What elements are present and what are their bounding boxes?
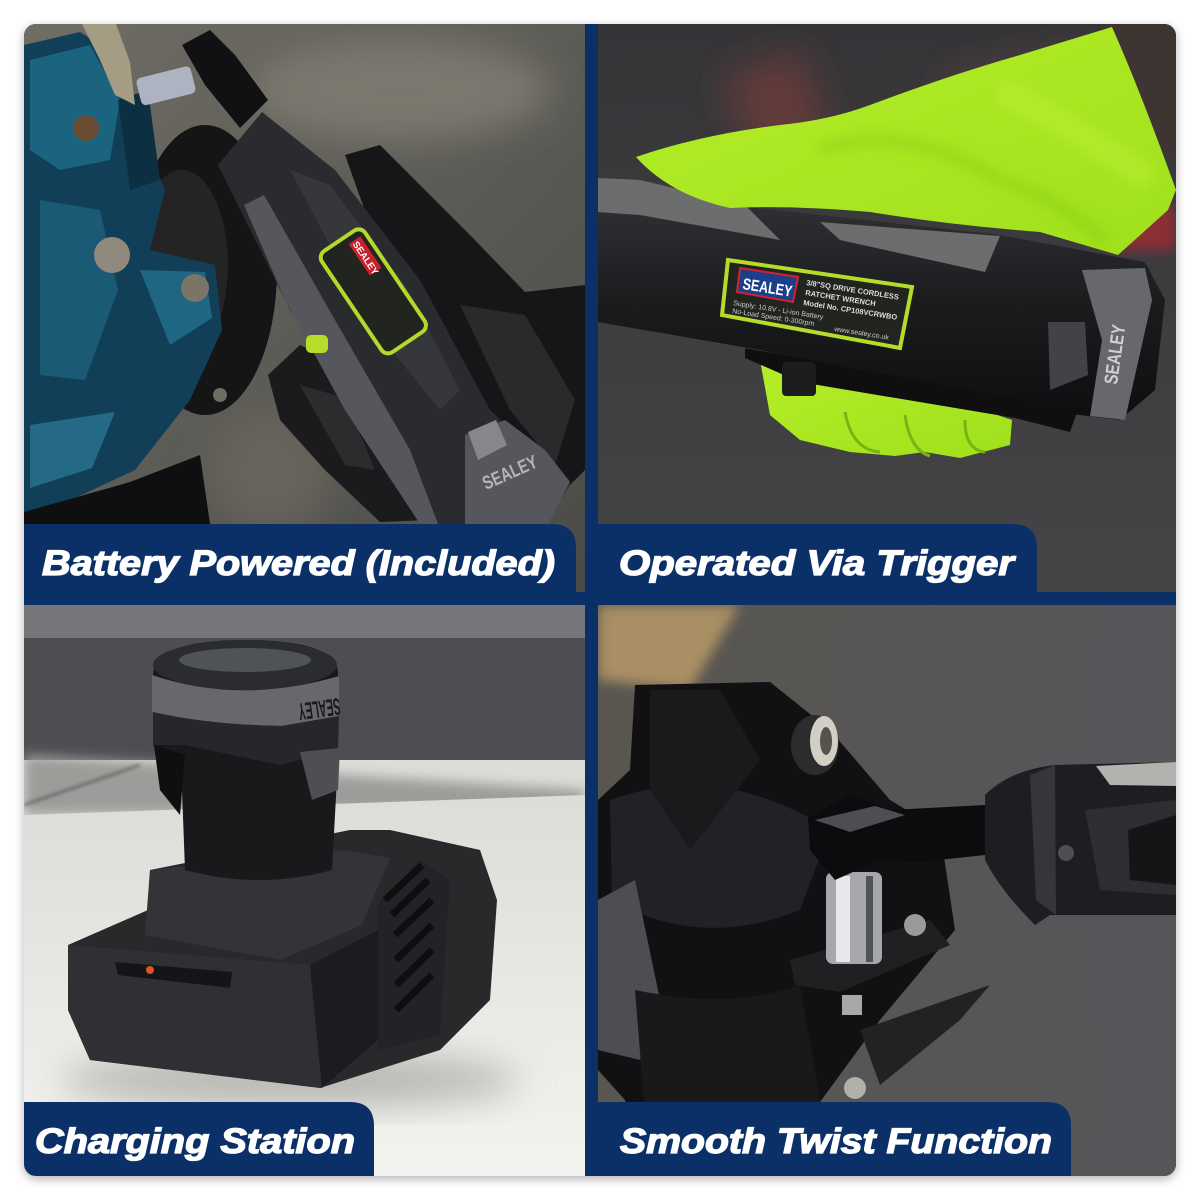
icon: socket — [826, 872, 882, 964]
icon: black work glove — [268, 145, 585, 522]
icon: blue engine — [24, 32, 227, 524]
caption: battery powered: Battery Powered (Included) — [42, 544, 555, 583]
icon: trigger and black tool body: SEALEY — [1101, 323, 1130, 386]
tool label: www.sealey.co.uk — [833, 326, 890, 342]
tool label: RATCHET WRENCH — [805, 288, 876, 308]
panel: operated via trigger photo — [598, 24, 1176, 592]
icon: ratchet tool: SEALEY — [479, 452, 541, 495]
tool label: Model No. CP108VCRWBO — [803, 298, 898, 322]
caption tab: smooth twist function — [586, 1102, 1071, 1176]
icon: battery — [152, 640, 342, 880]
caption tab: operated via trigger — [586, 524, 1037, 592]
icon: ratchet tool — [182, 30, 570, 524]
icon: battery: SEALEY — [297, 692, 342, 725]
panel: charging station photo — [24, 605, 585, 1176]
panel: smooth twist function photo — [598, 605, 1176, 1176]
tool label — [722, 260, 912, 348]
tool label: SEALEY — [741, 276, 794, 301]
caption: charging station: Charging Station — [35, 1122, 355, 1161]
caption tab: battery powered — [24, 524, 576, 592]
caption: operated via trigger: Operated Via Trigger — [619, 544, 1017, 583]
tool label: Supply: 10.8V - Li-ion Battery — [733, 300, 824, 321]
icon: black engine assembly — [598, 682, 990, 1102]
icon: pulley — [150, 125, 277, 415]
caption: smooth twist function: Smooth Twist Function — [620, 1122, 1052, 1161]
tool label: 3/8"SQ DRIVE CORDLESS — [806, 278, 900, 302]
icon: socket — [82, 24, 197, 106]
caption tab: charging station — [24, 1102, 374, 1176]
icon: charger base — [68, 830, 497, 1088]
icon: green glove fingers — [760, 360, 1012, 458]
icon: green glove hand — [636, 27, 1176, 255]
tool label — [318, 226, 429, 356]
icon: trigger and black tool body — [598, 178, 1165, 432]
tool label: No-Load Speed: 0-300rpm — [732, 308, 815, 328]
panel: battery powered photo — [24, 24, 585, 592]
tool label: SEALEY — [350, 240, 381, 278]
icon: ratchet tool — [808, 762, 1176, 925]
